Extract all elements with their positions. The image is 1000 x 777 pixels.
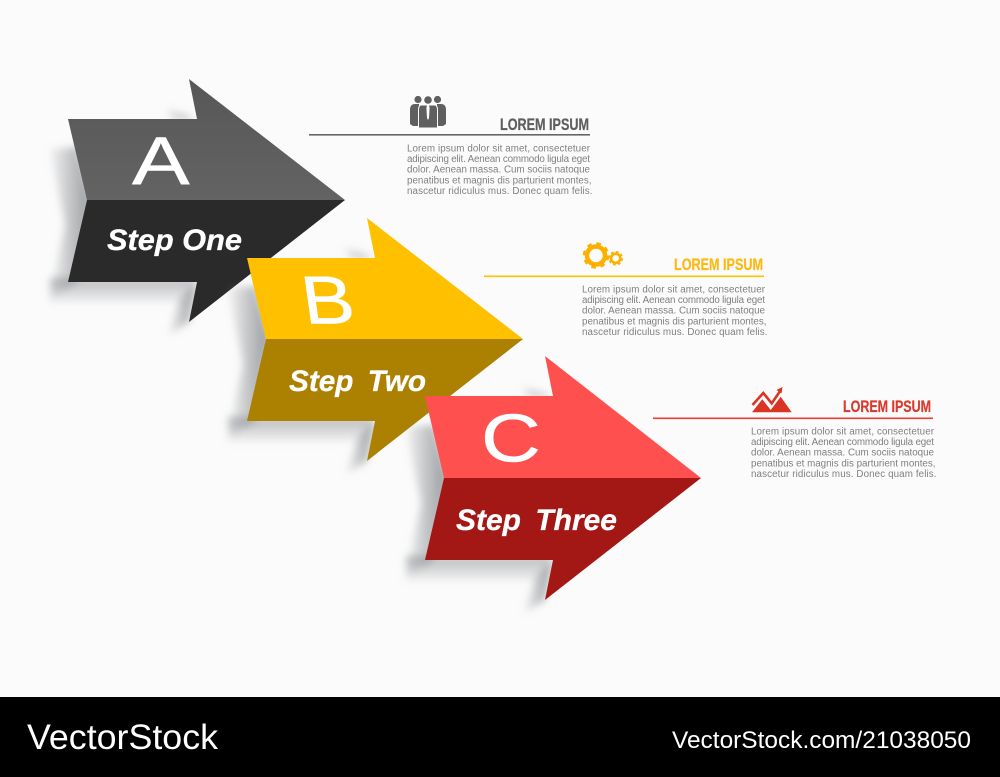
letter B: B	[296, 262, 359, 338]
body text: dolor. Aenean massa. Cum sociis natoque	[751, 448, 935, 458]
label: Step One: Step One	[107, 224, 242, 257]
icon: gears	[584, 244, 622, 267]
arrow B: step two	[228, 218, 523, 475]
body text: nascetur ridiculus mus. Donec quam felis.	[582, 327, 768, 338]
arrow A: step one	[50, 79, 345, 336]
letter C: C	[481, 401, 541, 477]
body text: penatibus et magnis dis parturient montes,	[751, 458, 936, 470]
body text: nascetur ridiculus mus. Donec quam felis.	[407, 186, 592, 197]
body text: Lorem ipsum dolor sit amet, consectetuer	[582, 284, 766, 296]
info block C	[653, 387, 936, 480]
body text: penatibus et magnis dis parturient montes,	[582, 316, 766, 328]
footer logo: VectorStock	[27, 718, 219, 757]
arrow C: step three	[406, 356, 701, 614]
info block A	[309, 96, 592, 197]
info block B	[484, 244, 768, 338]
icon: people	[410, 96, 446, 128]
body text: nascetur ridiculus mus. Donec quam felis.	[751, 469, 936, 480]
body text: dolor. Aenean massa. Cum sociis natoque	[582, 306, 766, 316]
body text: dolor. Aenean massa. Cum sociis natoque	[407, 164, 591, 176]
label: Step Two: Step Two	[289, 365, 426, 398]
body text	[751, 426, 936, 480]
body text	[582, 284, 768, 338]
body text: Lorem ipsum dolor sit amet, consectetuer	[407, 144, 591, 154]
body text: penatibus et magnis dis parturient montes,	[407, 176, 592, 186]
body text	[407, 144, 592, 197]
footer url: VectorStock.com/21038050	[672, 727, 971, 754]
body text: Lorem ipsum dolor sit amet, consectetuer	[751, 426, 935, 438]
icon: rising chart	[752, 387, 792, 412]
body text: adipiscing elit. Aenean commodo ligula eget	[751, 437, 934, 448]
label: Step Three: Step Three	[456, 504, 617, 537]
heading: LOREM IPSUM	[674, 255, 763, 274]
heading: LOREM IPSUM	[843, 397, 931, 416]
letter A: A	[132, 124, 190, 199]
body text: adipiscing elit. Aenean commodo ligula eget	[407, 154, 590, 165]
heading: LOREM IPSUM	[500, 115, 589, 134]
body text: adipiscing elit. Aenean commodo ligula eget	[582, 295, 765, 306]
footer bar	[0, 697, 1000, 777]
